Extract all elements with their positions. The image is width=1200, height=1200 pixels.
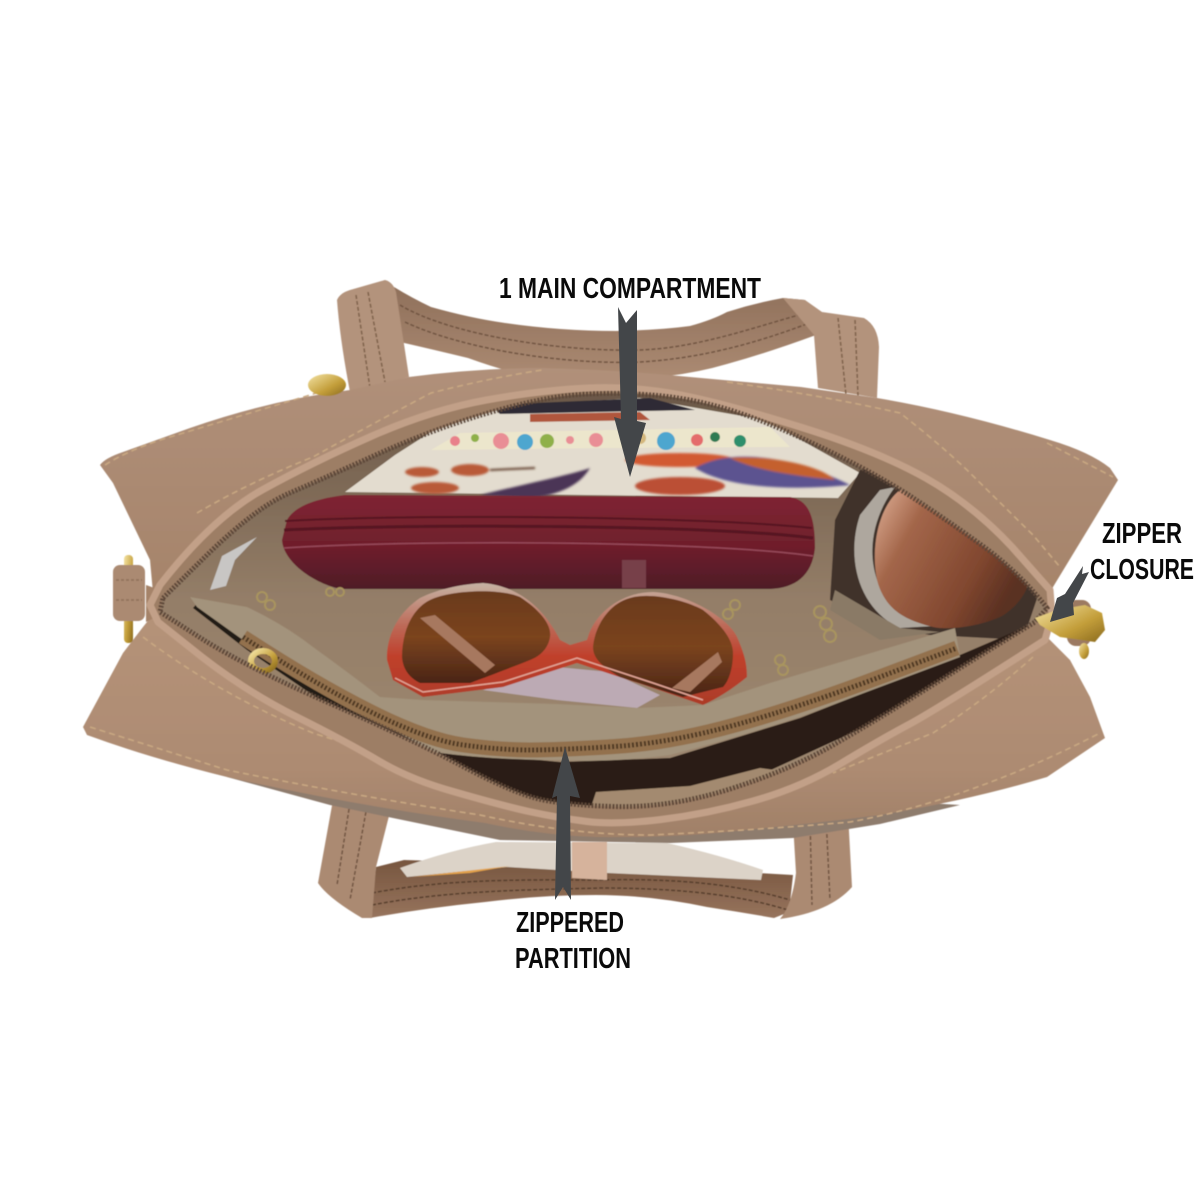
- front handle: [318, 800, 852, 919]
- interior lining: [164, 393, 1042, 770]
- label: zippered partition: PARTITION: [515, 943, 631, 975]
- bottle: [830, 469, 1038, 640]
- lining motifs: [257, 588, 836, 675]
- interior contents: [150, 385, 1050, 815]
- floral strip flowers: [450, 432, 746, 450]
- label: zipper closure: [1090, 518, 1194, 586]
- arrow: main compartment: [614, 307, 646, 477]
- partition zipper pull: [251, 651, 275, 671]
- top clasp: [308, 374, 346, 396]
- maroon wallet: [282, 495, 815, 589]
- zippered partition: [190, 597, 960, 761]
- notebook: [345, 398, 860, 498]
- handbag photo: [83, 280, 1118, 919]
- left grey lining patch: [210, 537, 257, 590]
- zipper teeth: [160, 393, 1047, 807]
- top panel: [100, 368, 1118, 615]
- arrow: zippered partition: [552, 747, 580, 900]
- painted flowers and bird: [405, 453, 850, 498]
- label: zippered partition: [515, 907, 631, 975]
- arrow: zipper closure: [1050, 566, 1089, 622]
- label: zippered partition: ZIPPERED: [516, 907, 624, 939]
- sunglasses: [387, 583, 747, 708]
- white insert behind handle: [400, 842, 763, 880]
- zipper tape and piping: [150, 388, 1052, 823]
- zipper pull: [1035, 600, 1105, 659]
- underside panel: [227, 777, 960, 843]
- stitching: [90, 370, 1113, 835]
- label: 1 main compartment: 1 MAIN COMPARTMENT: [499, 273, 761, 305]
- bottom panel: [83, 612, 1105, 837]
- dark front pocket: [433, 625, 1030, 810]
- back handle: [337, 280, 879, 398]
- side strap tab: [113, 555, 160, 643]
